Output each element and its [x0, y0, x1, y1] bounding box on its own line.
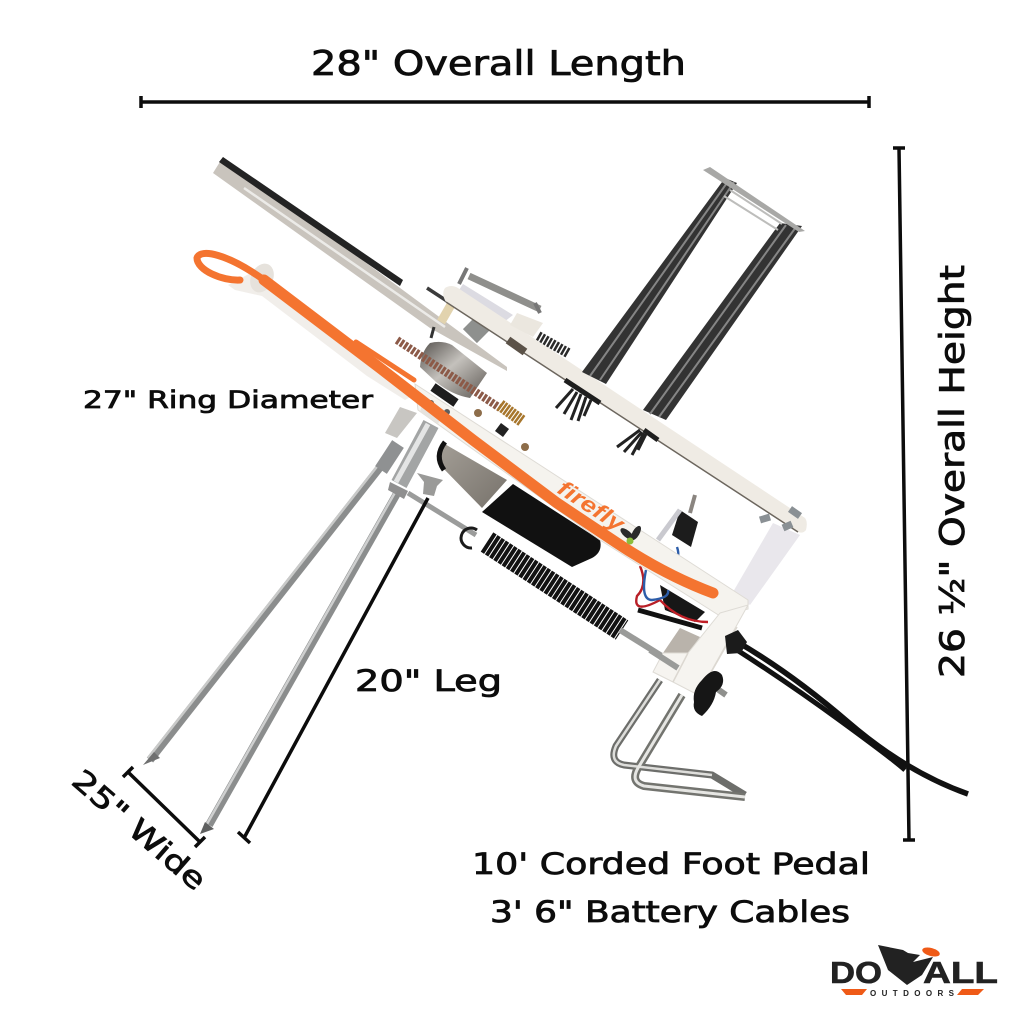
logo wordmark: DO [830, 955, 882, 990]
label: overall height: 26 ½" Overall Height [933, 265, 973, 678]
label: cords [472, 847, 870, 929]
firefly brand: firefly [553, 475, 631, 538]
ground stand wires [614, 680, 745, 797]
extension spring [408, 493, 681, 668]
gear and clutch disc [397, 288, 522, 434]
label: cords: 3' 6" Battery Cables [490, 895, 850, 929]
launch rods [556, 167, 805, 455]
main plate [415, 384, 748, 695]
firefly brand [553, 475, 643, 544]
motor [439, 442, 601, 567]
spring assembly [455, 284, 513, 325]
width line [123, 767, 205, 847]
logo head [878, 945, 933, 985]
label: ring diameter: 27" Ring Diameter [83, 386, 373, 414]
firefly leaf mark [619, 524, 643, 544]
legs [143, 424, 443, 834]
label: wide: 25" Wide [65, 763, 213, 897]
leg bracket [385, 407, 417, 438]
logo: Do-All Outdoors [830, 945, 998, 998]
heading: overall length: 28" Overall Length [311, 44, 686, 84]
logo orange disc [921, 946, 941, 958]
dimension: overall height [893, 148, 973, 840]
wiring [636, 547, 708, 628]
ring arm [228, 267, 420, 400]
label: cords: 10' Corded Foot Pedal [472, 847, 870, 881]
toggle switch [658, 495, 698, 547]
rear bracket [733, 523, 800, 605]
leg line [238, 498, 428, 843]
throwing arm [213, 157, 507, 371]
dimension: width [65, 763, 213, 897]
label: leg: 20" Leg [355, 664, 502, 698]
dimension: leg length [238, 498, 502, 843]
height line [893, 148, 915, 840]
cable gland and cable [725, 630, 968, 794]
logo tagline: OUTDOORS [870, 989, 955, 998]
dimension: overall length [141, 44, 869, 108]
length line [141, 96, 869, 108]
bracket bolts [760, 509, 800, 528]
ring clip [246, 260, 278, 296]
logo: Do-All Outdoors: ALL [923, 955, 998, 990]
logo bars [841, 989, 984, 995]
clay thrower machine [143, 157, 968, 834]
orange ring tube [197, 253, 713, 593]
clamp knob [694, 671, 726, 716]
upper plate [443, 268, 807, 533]
adjustment rod end [650, 650, 678, 668]
